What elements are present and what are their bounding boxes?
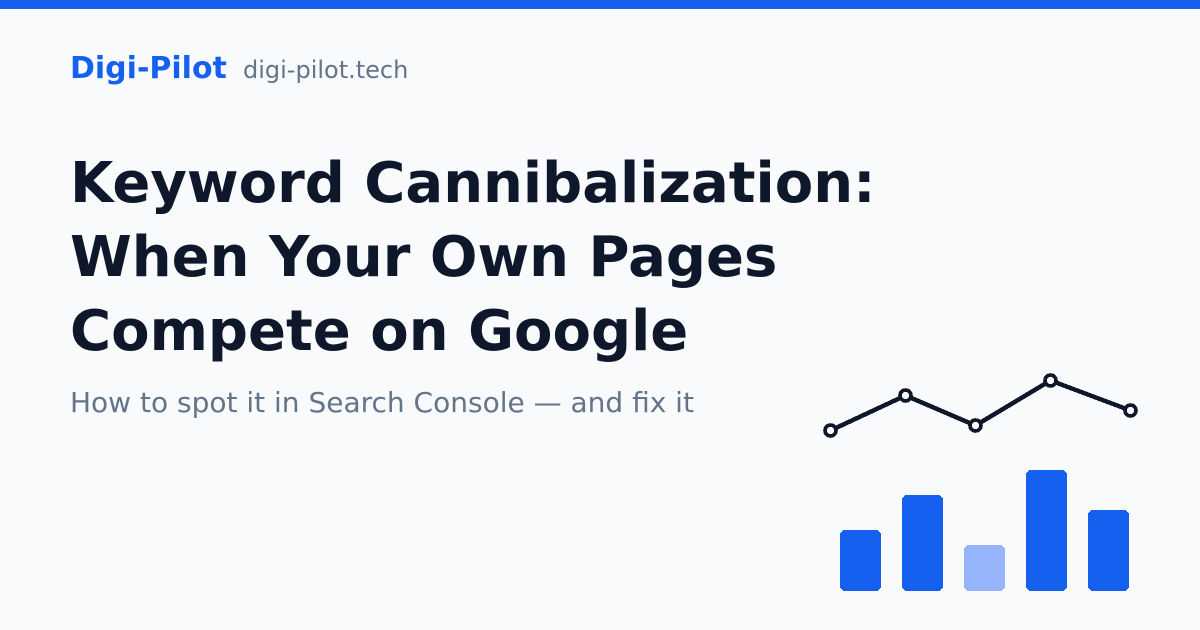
- subtitle: How to spot it in Search Console — and fix it: [70, 386, 694, 419]
- brand name: Digi-Pilot: [70, 51, 227, 86]
- bar chart: [840, 470, 1129, 591]
- title: Keyword Cannibalization:: [70, 151, 875, 216]
- top accent bar: [0, 0, 1200, 9]
- title: When Your Own Pages: [70, 225, 777, 290]
- line chart: [825, 375, 1136, 436]
- title: [70, 151, 875, 364]
- title: Compete on Google: [70, 299, 688, 364]
- brand domain: digi-pilot.tech: [243, 56, 408, 84]
